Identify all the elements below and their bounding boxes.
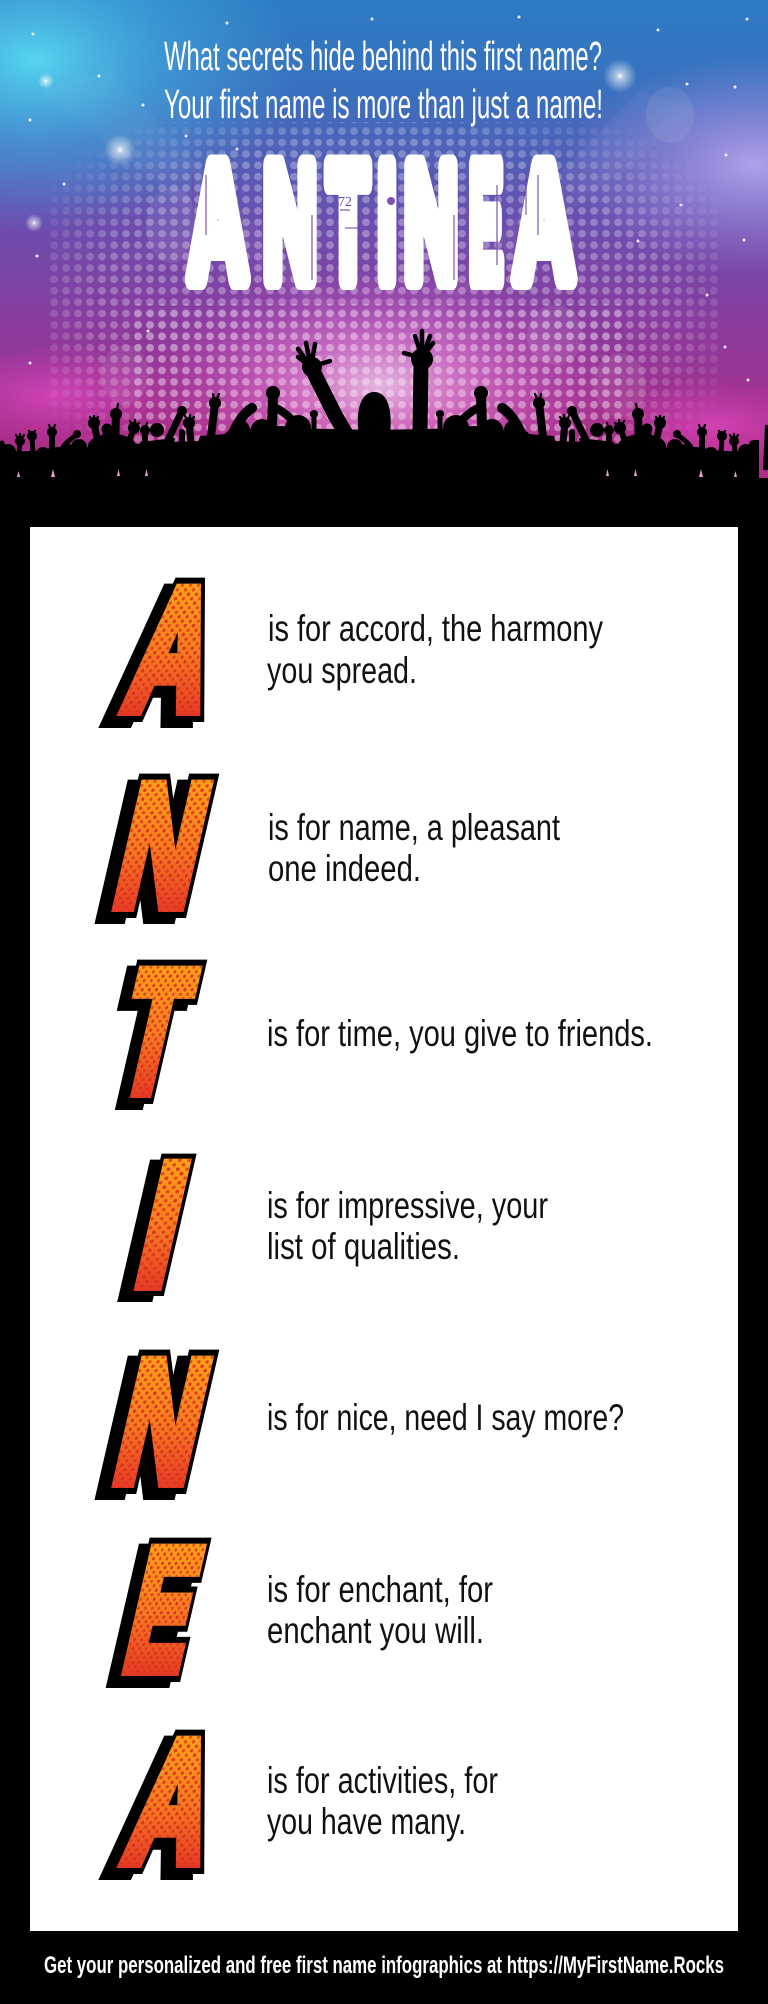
big name: ANTINEA: E (469, 129, 503, 314)
letter A: A (102, 1711, 223, 1904)
row: N nice (90, 1326, 624, 1525)
glow: pink centre (140, 265, 620, 505)
panel: white name list (30, 527, 738, 1931)
row: I impressive (112, 1129, 548, 1327)
black base below crowd (0, 478, 768, 530)
central figure: right arm (420, 365, 421, 430)
big name: ANTINEA (188, 129, 574, 315)
big name: ANTINEA: T (327, 130, 369, 314)
left palm (302, 357, 322, 377)
text: activities: you have many. (267, 1801, 466, 1842)
row: N name (90, 750, 561, 949)
letter A: A (113, 1705, 234, 1898)
text: impressive: list of qualities. (267, 1226, 460, 1267)
letter A: A (102, 559, 223, 752)
glow: cyan top left (0, 0, 295, 230)
text: enchant: enchant you will. (267, 1610, 484, 1651)
right hand fingers (404, 331, 433, 358)
letter T: T (104, 937, 207, 1129)
central figure: head and body (330, 392, 420, 445)
letter A: A (113, 553, 234, 746)
letter E: E (101, 1519, 205, 1712)
crowd silhouette (0, 331, 768, 520)
central figure: left arm (315, 375, 345, 432)
text: name: is for name, a pleasant (268, 807, 561, 848)
text: nice: is for nice, need I say more? (267, 1397, 624, 1438)
crowd: right half (376, 386, 759, 520)
letter I: I (123, 1129, 202, 1321)
letter E: E (112, 1513, 216, 1706)
text: time: is for time, you give to friends. (267, 1013, 653, 1054)
translucent bokeh circles (101, 87, 694, 417)
text: name: one indeed. (268, 848, 421, 889)
light beams (40, 70, 700, 360)
big name: ANTINEA: N (404, 131, 458, 315)
letter N: N (101, 750, 224, 943)
letter A: A (113, 553, 234, 746)
big name: ANTINEA: I (378, 130, 396, 314)
sky gradient (0, 0, 768, 500)
letter A: A (113, 553, 234, 746)
letter N: N (101, 750, 224, 943)
row: A accord (102, 553, 603, 752)
stars (25, 16, 750, 382)
big name: ANTINEA: A (514, 129, 574, 314)
letter N: N (101, 1326, 224, 1519)
text: accord: you spread. (267, 650, 417, 691)
texture number: 72 (338, 195, 352, 210)
halftone dots over glow (132, 304, 624, 454)
letter A: A (113, 1705, 234, 1898)
letter N: N (90, 756, 212, 949)
big name: ANTINEA: N (263, 131, 317, 315)
distressed scratches (193, 172, 538, 280)
header banner: concert background (0, 0, 768, 505)
glow: lavender right (565, 55, 768, 275)
letter N: N (90, 1332, 212, 1525)
left hand fingers (298, 343, 330, 367)
glow: magenta left (0, 345, 175, 445)
letter A: A (113, 1705, 234, 1898)
letter T: T (94, 943, 196, 1135)
text: enchant: is for enchant, for (267, 1569, 493, 1610)
right palm (411, 348, 433, 370)
letter E: E (112, 1513, 216, 1706)
texture dot (387, 197, 395, 205)
letter I: I (112, 1135, 190, 1327)
letter N: N (101, 1326, 224, 1519)
letter N: N (101, 1326, 224, 1519)
letter I: I (123, 1129, 202, 1321)
letter T: T (104, 937, 207, 1129)
crowd: left half (0, 386, 378, 520)
crowd: right edge extras (756, 425, 768, 470)
row: E enchant (101, 1513, 493, 1712)
central figure with raised hands (298, 331, 433, 445)
text: impressive: is for impressive, your (267, 1185, 548, 1226)
title question lines (164, 33, 603, 127)
text: activities: is for activities, for (267, 1760, 498, 1801)
letter N: N (101, 750, 224, 943)
letter E: E (112, 1513, 216, 1706)
letter I: I (123, 1129, 202, 1321)
row: A activities (102, 1705, 498, 1904)
letter T: T (104, 937, 207, 1129)
big name: ANTINEA: A (188, 130, 248, 314)
row: T time (94, 937, 653, 1135)
halftone dot wall (48, 122, 720, 462)
glow: magenta right (605, 380, 768, 470)
text: accord: is for accord, the harmony (268, 608, 603, 649)
